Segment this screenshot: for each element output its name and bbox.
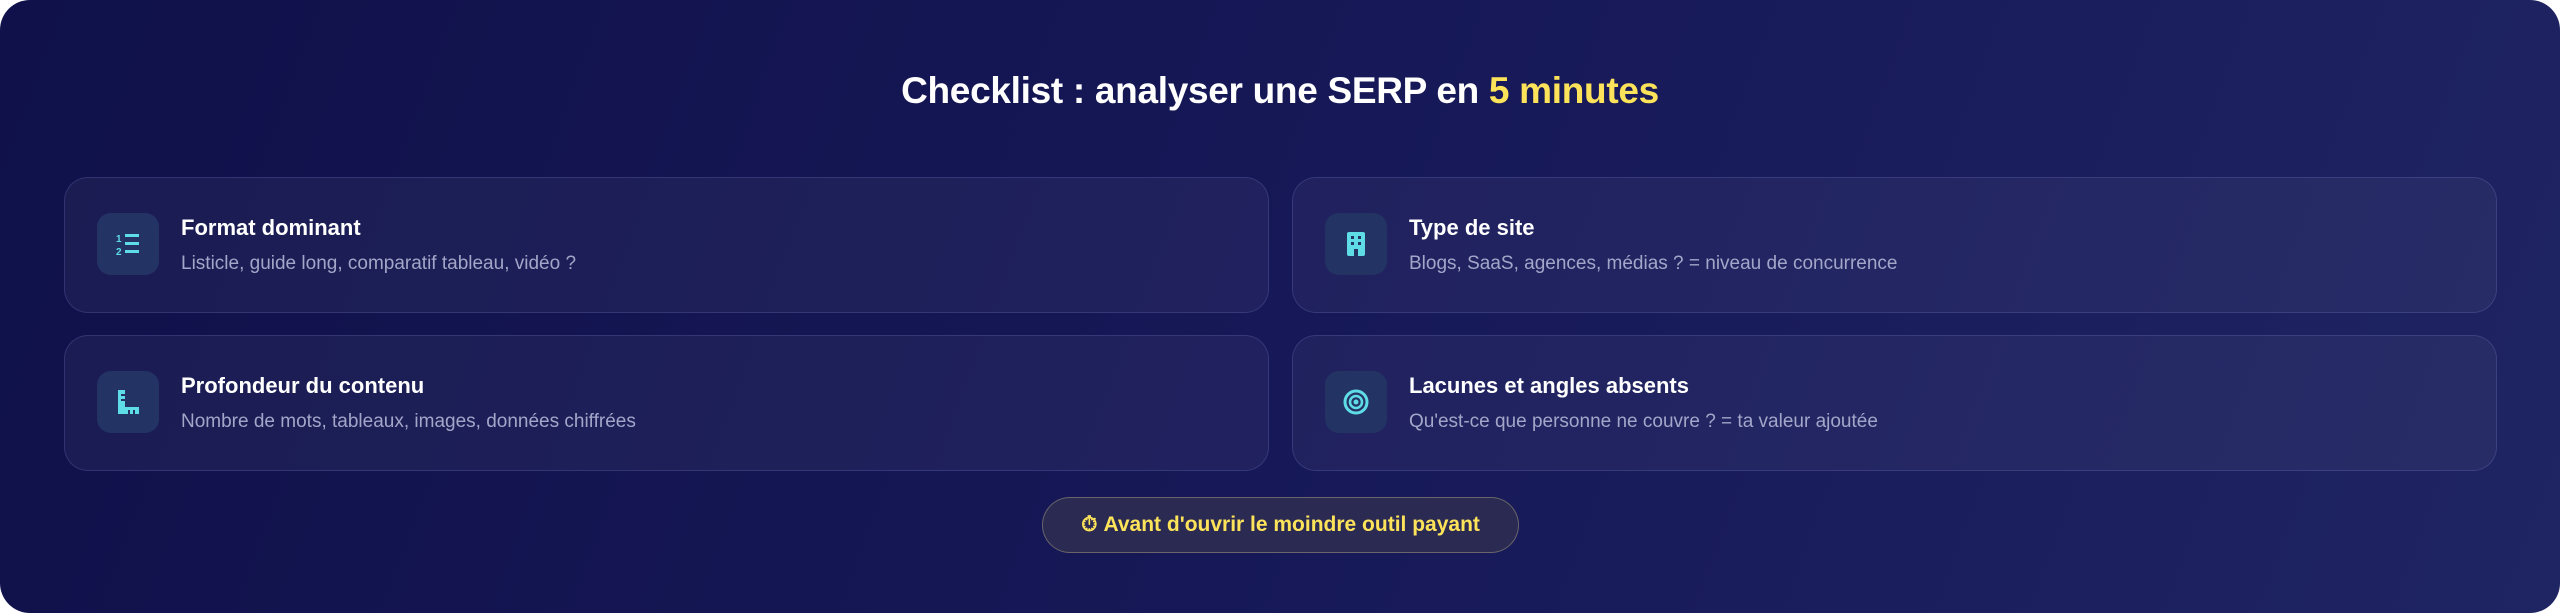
icon: numbered list: 1 — [116, 234, 122, 245]
text: Qu'est-ce que personne ne couvre ? = ta valeur ajoutée — [1409, 411, 1878, 432]
callout button: ⏱ — [1081, 513, 1097, 536]
icon: building — [1325, 213, 1387, 275]
heading: Type de site — [1409, 215, 1535, 240]
icon: target — [1325, 371, 1387, 433]
heading: Format dominant — [181, 215, 361, 240]
panel: profondeur — [64, 335, 1269, 471]
text: Listicle, guide long, comparatif tableau, vidéo ? — [181, 253, 576, 274]
panel: type de site — [1292, 177, 2497, 313]
icon: ruler — [97, 371, 159, 433]
panel: format dominant — [64, 177, 1269, 313]
heading: Profondeur du contenu — [181, 373, 424, 398]
title: Checklist : analyser une SERP en 5 minutes — [901, 70, 1659, 111]
callout button: Avant d'ouvrir le moindre outil payant — [1103, 513, 1480, 536]
heading: Lacunes et angles absents — [1409, 373, 1689, 398]
text: Nombre de mots, tableaux, images, données chiffrées — [181, 411, 636, 432]
text: Blogs, SaaS, agences, médias ? = niveau de concurrence — [1409, 253, 1898, 274]
icon: numbered list: 2 — [116, 247, 122, 258]
icon: numbered list — [97, 213, 159, 275]
panel: lacunes — [1292, 335, 2497, 471]
callout button — [1042, 497, 1519, 553]
